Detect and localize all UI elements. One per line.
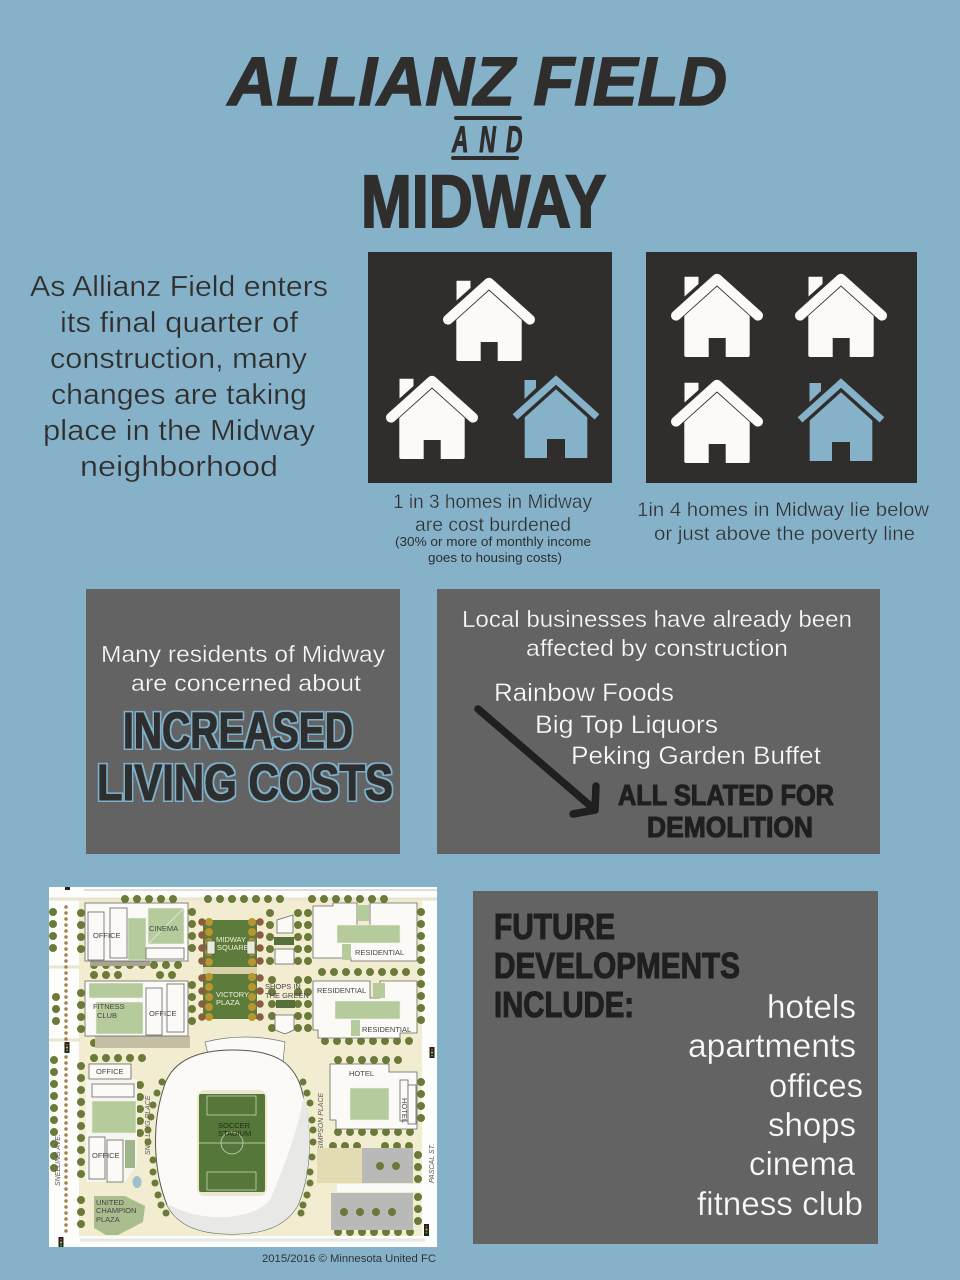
pitch xyxy=(199,1094,265,1192)
caption: cost burdened: 1 in 3 homes in Midway xyxy=(393,492,592,513)
text: businesses affected: affected by construction xyxy=(526,635,788,661)
text: businesses affected: Local businesses have already been xyxy=(462,606,852,632)
title xyxy=(226,43,727,243)
list: businesses xyxy=(494,679,821,770)
panel: 1 in 4 homes icons xyxy=(646,252,917,483)
plaza: Victory Plaza: PLAZA xyxy=(216,998,240,1007)
intro text block: construction, many xyxy=(50,343,308,375)
text: residents concerned: are concerned about xyxy=(131,670,362,696)
caption: cost burdened: (30% or more of monthly income xyxy=(395,534,591,549)
text: residents concerned: Many residents of Midway xyxy=(101,641,386,667)
street trees xyxy=(53,899,421,1232)
text: all slated for demolition xyxy=(618,780,834,844)
plaza: Midway Square: SQUARE xyxy=(217,943,249,952)
heading: future developments include: DEVELOPMENTS xyxy=(494,945,740,986)
parking and paving xyxy=(317,1148,422,1230)
caption: cost burdened xyxy=(393,492,592,565)
block: office and cinema: OFFICE xyxy=(93,931,120,940)
pond xyxy=(132,1176,142,1188)
street labels xyxy=(55,1092,436,1186)
intro text block: changes are taking xyxy=(51,379,307,411)
heading: increased living costs xyxy=(97,702,393,811)
intro text block: place in the Midway xyxy=(43,415,316,447)
street labels: SIMPSON PLACE xyxy=(318,1092,325,1150)
text: all slated for demolition: ALL SLATED FOR xyxy=(618,780,834,812)
traffic lights xyxy=(58,887,434,1247)
intro text block: neighborhood xyxy=(80,451,278,483)
list: developments xyxy=(688,988,863,1222)
text: businesses affected xyxy=(462,606,852,661)
heading: increased living costs: INCREASED xyxy=(123,702,353,759)
list: developments: fitness club xyxy=(697,1185,863,1222)
block: residential south xyxy=(313,981,417,1038)
icon: blue house xyxy=(800,383,882,461)
site plan map xyxy=(49,887,437,1247)
block: residential north: RESIDENTIAL xyxy=(355,948,404,957)
list: businesses: Rainbow Foods xyxy=(494,679,674,707)
title line: and xyxy=(451,116,522,160)
block: fitness club and office: CLUB xyxy=(97,1011,117,1020)
block: residential south: RESIDENTIAL xyxy=(362,1025,411,1034)
block: fitness club and office: OFFICE xyxy=(149,1009,176,1018)
block: fitness club and office: FITNESS xyxy=(93,1002,125,1011)
list: developments: offices xyxy=(769,1067,863,1104)
list: businesses: Peking Garden Buffet xyxy=(571,742,821,770)
icon: white house top right xyxy=(800,277,882,357)
icon: white house bottom left xyxy=(676,383,758,463)
plaza: Victory Plaza xyxy=(202,967,260,1024)
street labels: PASCAL ST. xyxy=(429,1144,436,1183)
stadium xyxy=(156,1037,309,1234)
pitch: SOCCER xyxy=(218,1121,251,1130)
caption: cost burdened: are cost burdened xyxy=(415,515,571,536)
caption: poverty line xyxy=(637,499,930,545)
intro text block: its final quarter of xyxy=(60,307,299,339)
heading: future developments include: INCLUDE: xyxy=(494,984,634,1025)
list: businesses: Big Top Liquors xyxy=(535,711,718,739)
title line: and: D xyxy=(506,118,522,160)
block: west offices: OFFICE xyxy=(92,1151,120,1160)
panel: future developments xyxy=(473,891,878,1244)
caption: poverty line: or just above the poverty line xyxy=(654,523,915,545)
plaza: Midway Square xyxy=(202,920,260,968)
United Champion Plaza xyxy=(94,1196,145,1235)
heading: future developments include: FUTURE xyxy=(494,906,615,947)
title line: and: A xyxy=(451,118,469,160)
block: hotel xyxy=(330,1064,417,1129)
block: west offices xyxy=(86,1064,137,1182)
icon: white house left xyxy=(391,379,473,459)
plaza: Victory Plaza: VICTORY xyxy=(216,990,249,999)
title line: Midway: MIDWAY xyxy=(361,160,606,243)
United Champion Plaza: PLAZA xyxy=(96,1215,120,1224)
title line: and: N xyxy=(479,118,496,160)
shops in the green: SHOPS IN xyxy=(265,982,301,991)
panel: 1 in 3 homes icons xyxy=(368,252,612,483)
list: developments: shops xyxy=(768,1106,856,1143)
heading: increased living costs: LIVING COSTS xyxy=(97,754,393,811)
United Champion Plaza: UNITED xyxy=(96,1198,124,1207)
caption: poverty line: 1in 4 homes in Midway lie below xyxy=(637,499,930,521)
block: hotel: HOTEL xyxy=(349,1069,374,1078)
map credit: 2015/2016 © Minnesota United FC xyxy=(262,1253,436,1265)
panel: increased living costs xyxy=(86,589,400,854)
icon: white house top left xyxy=(676,277,758,357)
intro text block: As Allianz Field enters xyxy=(30,271,328,303)
text: all slated for demolition: DEMOLITION xyxy=(647,812,813,844)
list: developments: hotels xyxy=(767,988,856,1025)
icon: white house top xyxy=(448,281,530,361)
block: office and cinema xyxy=(85,903,188,966)
stadium ring trees xyxy=(144,1078,316,1216)
icon: blue house xyxy=(515,380,597,458)
block: hotel: HOTEL xyxy=(400,1098,409,1123)
arrow xyxy=(478,709,596,814)
title line: Allianz Field: ALLIANZ FIELD xyxy=(226,43,727,120)
plaza: Midway Square: MIDWAY xyxy=(216,935,246,944)
street labels: SNELLING PLACE xyxy=(145,1095,152,1155)
list: developments: apartments xyxy=(688,1027,856,1064)
United Champion Plaza: CHAMPION xyxy=(96,1206,136,1215)
pitch: STADIUM xyxy=(218,1129,251,1138)
caption: cost burdened: goes to housing costs) xyxy=(428,550,562,565)
block: office and cinema: CINEMA xyxy=(149,924,178,933)
shops in the green xyxy=(265,915,309,1034)
heading: future developments include xyxy=(494,906,740,1025)
street labels: SNELLING AVE. xyxy=(55,1134,62,1186)
block: west offices: OFFICE xyxy=(96,1067,124,1076)
block: fitness club and office xyxy=(85,981,190,1048)
panel: local businesses xyxy=(437,589,880,854)
block: residential north xyxy=(313,903,417,961)
block: residential south: RESIDENTIAL xyxy=(317,986,366,995)
list: developments: cinema xyxy=(749,1145,856,1182)
shops in the green: THE GREEN xyxy=(265,991,309,1000)
text: residents concerned xyxy=(101,641,386,696)
intro text block xyxy=(30,271,328,483)
